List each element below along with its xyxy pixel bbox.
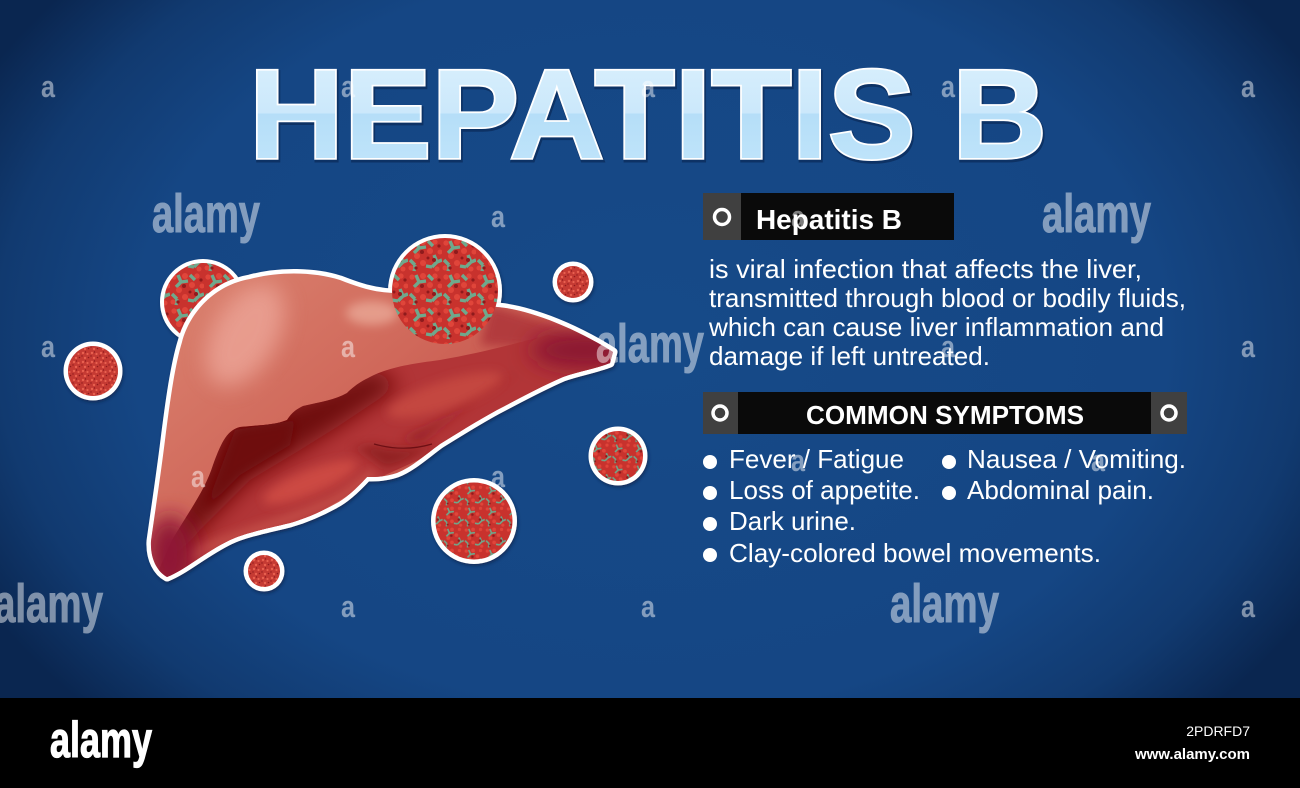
watermarks: a: [641, 69, 656, 104]
description text: is viral infection that affects the liver,: [709, 254, 1142, 284]
watermarks: alamy: [1042, 184, 1151, 244]
watermarks: alamy: [596, 314, 704, 374]
left tip shading: [146, 515, 194, 595]
virus: lower centre: [431, 478, 517, 564]
upper lobe highlight: [198, 278, 292, 393]
liver illustration: [146, 269, 620, 584]
virus: right: [588, 426, 648, 486]
watermarks: a: [941, 329, 956, 364]
watermarks: a: [341, 69, 356, 104]
watermarks: a: [1241, 589, 1256, 624]
watermarks: a: [1241, 329, 1256, 364]
lower right shade: [406, 413, 454, 444]
symptoms list: [703, 444, 1186, 568]
footer bar: [0, 698, 1300, 788]
footer bar: 2PDRFD7: [1186, 723, 1250, 739]
darker upper right band: [478, 306, 600, 350]
heading bar: Hepatitis B: [703, 193, 954, 240]
watermarks: a: [41, 329, 56, 364]
title: HEPATITIS B: [250, 45, 1048, 187]
symptoms list: Clay-colored bowel movements.: [729, 538, 1101, 568]
watermarks: a: [191, 459, 206, 494]
watermarks: a: [341, 589, 356, 624]
watermarks: a: [791, 443, 806, 478]
lobe fold: [350, 443, 436, 468]
description text: [708, 254, 1186, 371]
watermarks: a: [491, 199, 506, 234]
light band: [264, 458, 356, 506]
right lobe highlight: [346, 301, 398, 325]
watermarks: alamy: [890, 574, 999, 634]
watermarks: a: [791, 199, 806, 234]
description text: which can cause liver inflammation and: [708, 312, 1164, 342]
watermarks: alamy: [152, 184, 260, 244]
watermarks: a: [1241, 69, 1256, 104]
virus: behind liver top-left: [160, 259, 246, 345]
watermarks: a: [1091, 443, 1106, 478]
bottom rim light: [190, 474, 375, 558]
heading bar: common symptoms: COMMON SYMPTOMS: [806, 400, 1084, 430]
symptoms list: Dark urine.: [729, 506, 856, 536]
watermarks: [0, 69, 1256, 634]
dark wedge reinforcement: [214, 420, 291, 500]
virus: far left: [64, 342, 122, 400]
right band: [388, 372, 500, 418]
description text: transmitted through blood or bodily fluids,: [709, 283, 1186, 313]
watermarks: a: [491, 459, 506, 494]
watermarks: a: [41, 69, 56, 104]
symptoms list: Abdominal pain.: [967, 475, 1154, 505]
description text: damage if left untreated.: [709, 341, 990, 371]
title: HEPATITIS B: [249, 43, 1047, 185]
symptoms list: Loss of appetite.: [729, 475, 920, 505]
watermarks: a: [641, 589, 656, 624]
virus: small top right: [552, 262, 594, 302]
symptoms list: Fever / Fatigue: [729, 444, 904, 474]
footer bar: www.alamy.com: [1134, 746, 1250, 763]
heading bar: Hepatitis B: Hepatitis B: [756, 204, 902, 235]
footer bar: alamy: [50, 712, 152, 768]
virus: small bottom: [244, 550, 284, 592]
virus: large sticker border behind liver: [388, 234, 502, 348]
symptoms list: Nausea / Vomiting.: [967, 444, 1186, 474]
watermarks: a: [941, 69, 956, 104]
right tip shading: [530, 332, 640, 368]
dark shade under upper lobe: [176, 368, 403, 548]
lower lobe: [159, 342, 613, 577]
virus: large on liver: [392, 238, 498, 344]
heading bar: common symptoms: [703, 392, 1187, 434]
watermarks: a: [341, 329, 356, 364]
